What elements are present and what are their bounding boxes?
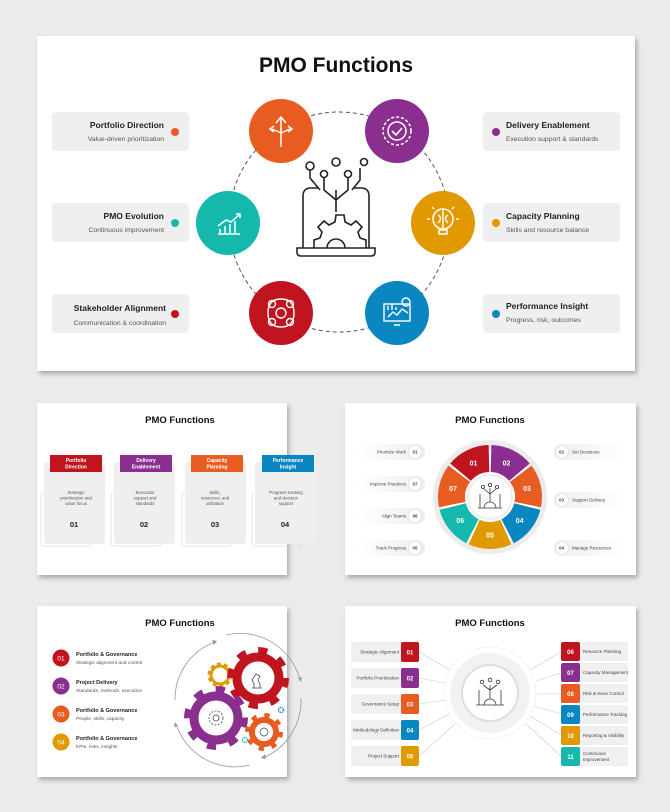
label: Performance Insight: Performance Insight	[506, 301, 588, 311]
card 01: Portfolio	[66, 458, 86, 464]
cycle ring: 07	[449, 486, 457, 493]
left labels: Track Progress	[376, 546, 407, 550]
card 01	[41, 455, 105, 546]
left items: 01	[407, 650, 414, 656]
connector lines	[419, 652, 561, 756]
dashed ring	[229, 112, 449, 332]
card 04: support	[279, 501, 294, 506]
gears diagram	[174, 633, 302, 767]
right labels: 02	[559, 450, 565, 454]
heading: PMO Functions	[455, 415, 525, 426]
panel: slide 2 cards	[37, 403, 316, 575]
label: Performance Insight: Progress, risk, outcomes	[506, 317, 581, 324]
card 02: Enablement	[132, 464, 161, 470]
label: PMO Evolution: PMO Evolution	[104, 211, 164, 221]
left items: 03	[407, 702, 414, 708]
card 04: and decision	[274, 496, 299, 500]
cycle ring: 02	[503, 460, 510, 468]
left items: Project Support	[368, 754, 400, 758]
cycle ring: 06	[456, 518, 464, 525]
card 02	[111, 455, 175, 546]
right items: 11	[567, 755, 574, 761]
icon circle: performance insight (blue)	[365, 281, 429, 345]
panel: slide 5 hub	[345, 606, 636, 777]
left labels: 05	[412, 546, 418, 550]
card 01: Strategic	[68, 490, 85, 495]
center icon: laptop with gear	[297, 158, 375, 256]
label: Performance Insight	[483, 294, 620, 333]
card 03: utilization	[206, 501, 225, 506]
left labels: Improve Practices	[370, 482, 407, 486]
list items: 02	[57, 684, 65, 690]
card 03: Capacity	[207, 458, 228, 464]
left items: Methodology Definition	[353, 728, 399, 732]
card 04: Performance	[273, 458, 303, 464]
right items: 06	[567, 650, 574, 656]
right items: Resource Planning	[583, 649, 622, 654]
right labels: 03	[559, 498, 565, 502]
label: Portfolio Direction: Value-driven prioritization	[88, 136, 164, 143]
label: Stakeholder Alignment	[52, 294, 189, 333]
card 04: Insight	[280, 464, 297, 470]
left items: Strategic Alignment	[360, 650, 400, 654]
list items: Portfolio & Governance	[76, 708, 137, 714]
left items: 04	[407, 728, 414, 734]
card 04	[252, 455, 316, 546]
label: PMO Evolution: Continuous improvement	[88, 227, 164, 234]
label: Capacity Planning: Capacity Planning	[506, 211, 580, 221]
card 01: prioritization and	[60, 496, 92, 500]
card 03: 03	[211, 520, 219, 529]
heading: PMO Functions	[455, 618, 525, 629]
icon circle: delivery enablement (purple)	[365, 99, 429, 163]
panel: main slide	[37, 36, 635, 371]
card 02: standards	[136, 501, 154, 506]
card 04: Progress tracking	[269, 490, 303, 495]
left items: Portfolio Prioritization	[356, 676, 399, 680]
list items: Strategic alignment and control	[76, 660, 142, 666]
list items: Portfolio & Governance	[76, 736, 137, 742]
right items: 07	[567, 671, 574, 677]
left labels: 06	[412, 514, 418, 518]
hub circle	[444, 647, 536, 739]
list items: Project Delivery	[76, 680, 119, 686]
card 01: Direction	[65, 464, 87, 470]
left labels: Align Teams	[382, 514, 407, 518]
right items: 09	[567, 713, 574, 719]
label: Portfolio Direction	[52, 112, 189, 151]
right items: 10	[567, 734, 574, 740]
card 02: support and	[134, 496, 157, 500]
cycle ring: 04	[516, 518, 524, 525]
icon circle: stakeholder alignment (red)	[249, 281, 313, 345]
label: Stakeholder Alignment: Communication & coordination	[73, 320, 166, 327]
list items: Standards, methods, execution	[76, 688, 142, 694]
heading: PMO Functions	[145, 618, 215, 629]
left labels	[355, 444, 425, 556]
list items: 01	[57, 656, 65, 662]
heading: PMO Functions	[145, 415, 215, 426]
label: Capacity Planning: Skills and resource balance	[506, 227, 589, 234]
card 01: value focus	[65, 501, 87, 506]
label: Delivery Enablement: Execution support & standards	[506, 136, 599, 143]
left items	[351, 642, 419, 766]
right labels: Set Decisions	[572, 450, 600, 454]
right items: Continuous	[583, 751, 607, 756]
panel: slide 3 cycle	[345, 403, 636, 575]
right items: Improvement	[583, 757, 610, 762]
label: Stakeholder Alignment: Stakeholder Alignment	[74, 303, 166, 313]
left labels: 07	[412, 482, 418, 486]
list items	[52, 650, 142, 750]
card 04: 04	[281, 520, 290, 529]
left items: 02	[407, 676, 414, 682]
cycle ring	[438, 445, 542, 549]
list items: 04	[57, 740, 65, 746]
left items: 05	[407, 754, 414, 760]
card 03: Planning	[206, 464, 228, 470]
list items: People, skills, capacity	[76, 716, 125, 722]
cycle ring: 03	[523, 486, 531, 493]
right labels	[554, 444, 626, 556]
right items	[561, 642, 629, 766]
right items: Performance Tracking	[583, 712, 628, 717]
label: Delivery Enablement: Delivery Enablement	[506, 120, 590, 130]
right labels: Manage Resources	[572, 546, 612, 550]
label: Capacity Planning	[483, 203, 620, 242]
list items: Portfolio & Governance	[76, 652, 137, 658]
card 02: Delivery	[136, 458, 156, 464]
left labels: 01	[412, 450, 418, 454]
card 02: Execution	[136, 490, 155, 495]
icon circle: PMO evolution (teal)	[196, 191, 260, 255]
cycle ring: 05	[486, 532, 494, 540]
card 03: resources, and	[201, 496, 230, 500]
title: PMO Functions	[259, 54, 413, 77]
list items: KPIs, risks, insights	[76, 744, 118, 750]
left labels: Prioritize Work	[377, 450, 407, 454]
right labels: 04	[559, 546, 565, 550]
card 03	[182, 455, 246, 546]
label: Portfolio Direction: Portfolio Direction	[90, 120, 164, 130]
icon circle: capacity planning (gold)	[411, 191, 475, 255]
card 03: Skills,	[209, 490, 221, 495]
panel: slide 4 gears	[37, 606, 302, 777]
right items: Risk & Issue Control	[583, 691, 624, 696]
right items: Capacity Management	[583, 670, 629, 675]
label: Delivery Enablement	[483, 112, 620, 151]
right labels: Support Delivery	[572, 498, 606, 502]
right items: Reporting & Visibility	[583, 733, 625, 738]
list items: 03	[57, 712, 65, 718]
icon circle: portfolio direction (orange)	[249, 99, 313, 163]
label: PMO Evolution	[52, 203, 189, 242]
right items: 08	[567, 692, 574, 698]
left items: Governance Setup	[361, 702, 399, 706]
cycle ring: 01	[470, 460, 477, 468]
card 02: 02	[140, 520, 148, 529]
card 01: 01	[70, 520, 78, 529]
